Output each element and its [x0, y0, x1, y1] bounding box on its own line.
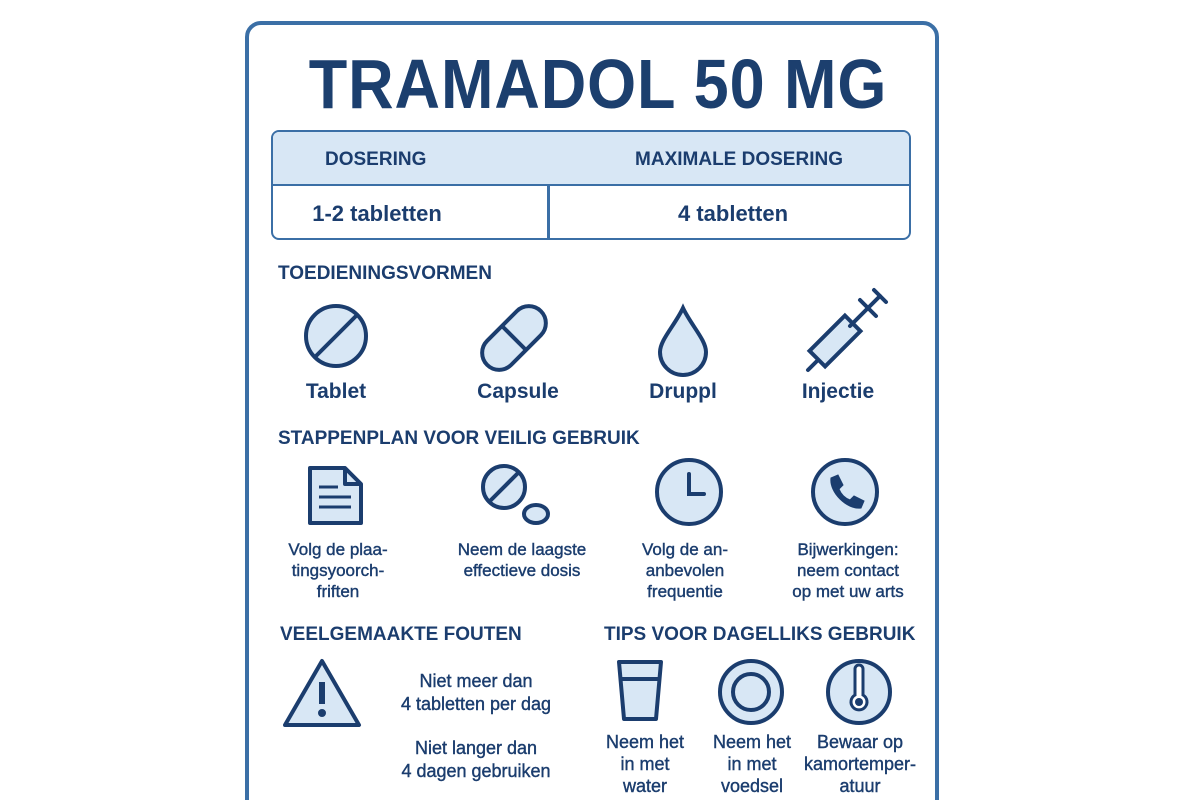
icon: syringe: [806, 288, 888, 372]
text: water: water: [623, 776, 667, 796]
label: capsule: Capsule: [477, 380, 559, 403]
text: water: [606, 732, 684, 796]
text: volg de plaatsingsvoorschriften: tingsyoorch-: [292, 561, 384, 580]
text: laagste dosis: Neem de laagste: [458, 540, 586, 559]
text: volg de plaatsingsvoorschriften: friften: [317, 582, 359, 601]
text: volg de plaatsingsvoorschriften: [288, 540, 388, 601]
label: druppl: Druppl: [649, 380, 717, 403]
icon: glass: [617, 660, 663, 721]
label: injectie: Injectie: [802, 380, 874, 403]
text: water: in met: [620, 754, 670, 774]
heading: tips: TIPS VOOR DAGELLIKS GEBRUIK: [604, 624, 915, 645]
text: laagste dosis: effectieve dosis: [464, 561, 580, 580]
heading: veelgemaakte fouten: VEELGEMAAKTE FOUTEN: [280, 624, 522, 645]
text: kamertemperatuur: atuur: [839, 776, 881, 796]
text: niet meer dan: 4 tabletten per dag: [401, 694, 551, 714]
heading: stappenplan: STAPPENPLAN VOOR VEILIG GEBRUIK: [278, 428, 640, 449]
icon: thermometer: [826, 659, 892, 725]
icon: tablet: [304, 304, 368, 368]
text: niet meer dan: [401, 671, 551, 714]
text: frequentie: anbevolen: [646, 561, 724, 580]
text: bijwerkingen: Bijwerkingen:: [797, 540, 899, 559]
icon: pills: [481, 464, 550, 525]
icon: phone: [811, 458, 879, 526]
dosage table: [271, 130, 911, 240]
title: TRAMADOL 50 MG: [309, 45, 887, 123]
text: voedsel: in met: [727, 754, 777, 774]
heading: toedieningsvormen: TOEDIENINGSVORMEN: [278, 263, 492, 284]
value: 1-2 tabletten: 1-2 tabletten: [312, 201, 442, 226]
text: voedsel: voedsel: [721, 776, 783, 796]
text: bijwerkingen: [792, 540, 904, 601]
text: frequentie: [642, 540, 728, 601]
text: voedsel: Neem het: [713, 732, 791, 752]
text: niet meer dan: Niet meer dan: [419, 671, 533, 691]
text: frequentie: Volg de an-: [642, 540, 728, 559]
text: water: Neem het: [606, 732, 684, 752]
text: kamertemperatuur: [804, 732, 916, 796]
text: laagste dosis: [458, 540, 586, 580]
text: kamertemperatuur: kamortemper-: [804, 754, 916, 774]
table header: [273, 132, 909, 186]
text: frequentie: frequentie: [647, 582, 723, 601]
text: bijwerkingen: op met uw arts: [792, 582, 904, 601]
header: dosering: DOSERING: [325, 149, 426, 170]
icon: plate: [718, 659, 784, 725]
icon: drop: [658, 303, 708, 377]
text: volg de plaatsingsvoorschriften: Volg de plaa-: [288, 540, 388, 559]
header: maximale dosering: MAXIMALE DOSERING: [635, 149, 843, 170]
value: 4 tabletten: 4 tabletten: [678, 201, 788, 226]
icon: document: [308, 466, 363, 525]
icon: capsule: [480, 304, 892, 725]
icon: clock: [655, 458, 723, 526]
text: niet langer dan: [401, 738, 551, 782]
icon: warning: [283, 658, 362, 727]
text: niet langer dan: 4 dagen gebruiken: [401, 761, 551, 781]
card panel: [245, 21, 939, 800]
text: bijwerkingen: neem contact: [797, 561, 899, 580]
text: niet langer dan: Niet langer dan: [415, 738, 537, 758]
label: tablet: Tablet: [306, 380, 366, 403]
text: kamertemperatuur: Bewaar op: [817, 732, 903, 752]
text: voedsel: [713, 732, 792, 796]
